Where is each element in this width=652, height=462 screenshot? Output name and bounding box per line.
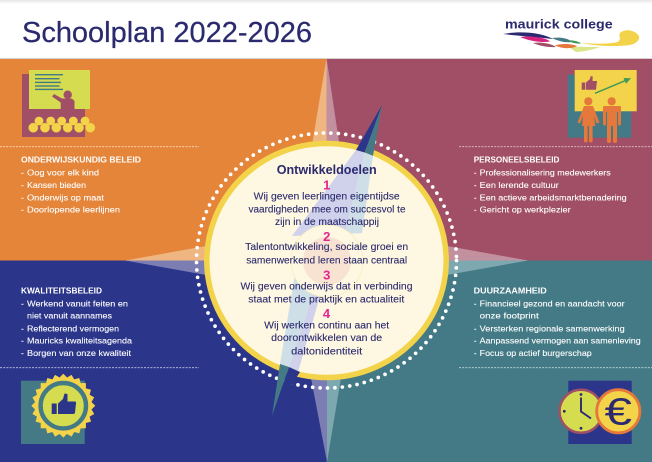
compass rays [125, 58, 528, 462]
text block: kwaliteitsbeleid: - [21, 348, 24, 358]
text block: personeelsbeleid: - [474, 192, 477, 202]
centre text: ontwikkeldoelen: Talentontwikkeling, sociale groei en [245, 242, 408, 253]
dashed divider right top [459, 146, 652, 148]
text block: duurzaamheid: onze footprint [480, 311, 539, 321]
centre text: ontwikkeldoelen: Ontwikkeldoelen [277, 162, 377, 177]
needle: translucent inner part [280, 150, 373, 372]
text block: onderwijskundig beleid: - [21, 168, 24, 178]
text block: onderwijskundig beleid: - [21, 205, 24, 215]
text block: kwaliteitsbeleid [21, 285, 132, 358]
centre text: ontwikkeldoelen: Wij geven leerlingen eigentijdse [254, 191, 400, 202]
centre text: ontwikkeldoelen: vaardigheden mee om succesvol te [248, 205, 406, 216]
title: Schoolplan 2022-2026 [22, 17, 312, 49]
text block: duurzaamheid: Versterken regionale samenwerking [480, 323, 625, 333]
text block: kwaliteitsbeleid: - [21, 298, 24, 308]
text block: duurzaamheid: Financieel gezond en aandacht voor [480, 298, 625, 308]
text block: onderwijskundig beleid: - [21, 192, 24, 202]
text block: onderwijskundig beleid: - [21, 180, 24, 190]
text block: onderwijskundig beleid [21, 154, 141, 215]
text block: personeelsbeleid: - [474, 168, 477, 178]
logo: maurick college [503, 17, 639, 52]
text block: duurzaamheid: DUURZAAMHEID [474, 285, 547, 295]
centre text: ontwikkeldoelen: zijn in de maatschappij [275, 217, 379, 228]
centre text: ontwikkeldoelen [240, 162, 413, 357]
centre text: ontwikkeldoelen: staat met de praktijk en actualiteit [248, 295, 404, 306]
panel: personeelsbeleid background [326, 59, 652, 260]
text block: duurzaamheid: Focus op actief burgerschap [480, 348, 592, 358]
text block: duurzaamheid: - [474, 348, 477, 358]
text block: onderwijskundig beleid: Doorlopende leerlijnen [27, 205, 120, 215]
centre text: ontwikkeldoelen: Wij geven onderwijs dat in verbinding [240, 281, 413, 292]
text block: personeelsbeleid: Gericht op werkplezier [480, 205, 571, 215]
centre circles [291, 225, 363, 297]
text block: personeelsbeleid: PERSONEELSBELEID [474, 154, 559, 164]
text block: personeelsbeleid: - [474, 180, 477, 190]
dashed divider left top [0, 146, 199, 148]
text block: personeelsbeleid: Een actieve arbeidsmarktbenadering [480, 192, 627, 202]
text block: duurzaamheid: - [474, 336, 477, 346]
panel: onderwijskundig beleid background [0, 59, 326, 260]
centre text: ontwikkeldoelen: samenwerkend leren staan centraal [246, 256, 407, 267]
panel: duurzaamheid background [326, 260, 652, 462]
text block: kwaliteitsbeleid: - [21, 336, 24, 346]
text block: onderwijskundig beleid: Kansen bieden [27, 180, 86, 190]
centre text: ontwikkeldoelen: 2 [323, 229, 330, 244]
text block: kwaliteitsbeleid: - [21, 323, 24, 333]
centre text: ontwikkeldoelen: doorontwikkelen van de [271, 333, 383, 344]
text block: onderwijskundig beleid: Onderwijs op maat [27, 192, 105, 202]
icon: staff with growth chart [568, 70, 637, 143]
dashed divider right bottom [459, 367, 652, 369]
text block: onderwijskundig beleid: ONDERWIJSKUNDIG BELEID [21, 154, 141, 164]
centre text: ontwikkeldoelen: Wij werken continu aan het [264, 320, 389, 331]
needle: solid tips [272, 105, 382, 416]
centre text: ontwikkeldoelen: 4 [323, 306, 331, 321]
text block: duurzaamheid: - [474, 323, 477, 333]
dashed divider left bottom [0, 367, 199, 369]
text block: duurzaamheid: - [474, 298, 477, 308]
icon: quality badge with thumb [21, 374, 95, 444]
centre text: ontwikkeldoelen: daltonidentiteit [291, 346, 362, 357]
text block: kwaliteitsbeleid: KWALITEITSBELEID [21, 285, 102, 295]
text block: kwaliteitsbeleid: Werkend vanuit feiten en [27, 298, 128, 308]
text block: kwaliteitsbeleid: Reflecterend vermogen [27, 323, 119, 333]
text block: kwaliteitsbeleid: Borgen van onze kwaliteit [27, 348, 132, 358]
text block: onderwijskundig beleid: Oog voor elk kind [27, 168, 99, 178]
text block: duurzaamheid [474, 285, 641, 358]
logo: maurick college: maurick college [505, 17, 613, 31]
panel: kwaliteitsbeleid background [0, 260, 326, 462]
text block: personeelsbeleid: Een lerende cultuur [480, 180, 559, 190]
dotted circle [196, 133, 456, 388]
text block: personeelsbeleid [474, 154, 627, 215]
icon: clock and euro coin [560, 381, 640, 444]
text block: kwaliteitsbeleid: niet vanuit aannames [27, 311, 112, 321]
icon: clock and euro coin: € [604, 392, 632, 434]
central disc with yellow ring [207, 144, 446, 378]
centre text: ontwikkeldoelen: 1 [323, 178, 330, 192]
text block: personeelsbeleid: - [474, 205, 477, 215]
centre text: ontwikkeldoelen: 3 [323, 268, 330, 282]
icon: teacher at board [22, 70, 95, 137]
text block: duurzaamheid: Aanpassend vermogen aan samenleving [480, 336, 641, 346]
text block: personeelsbeleid: Professionalisering medewerkers [480, 168, 611, 178]
text block: kwaliteitsbeleid: Mauricks kwaliteitsagenda [27, 336, 132, 346]
